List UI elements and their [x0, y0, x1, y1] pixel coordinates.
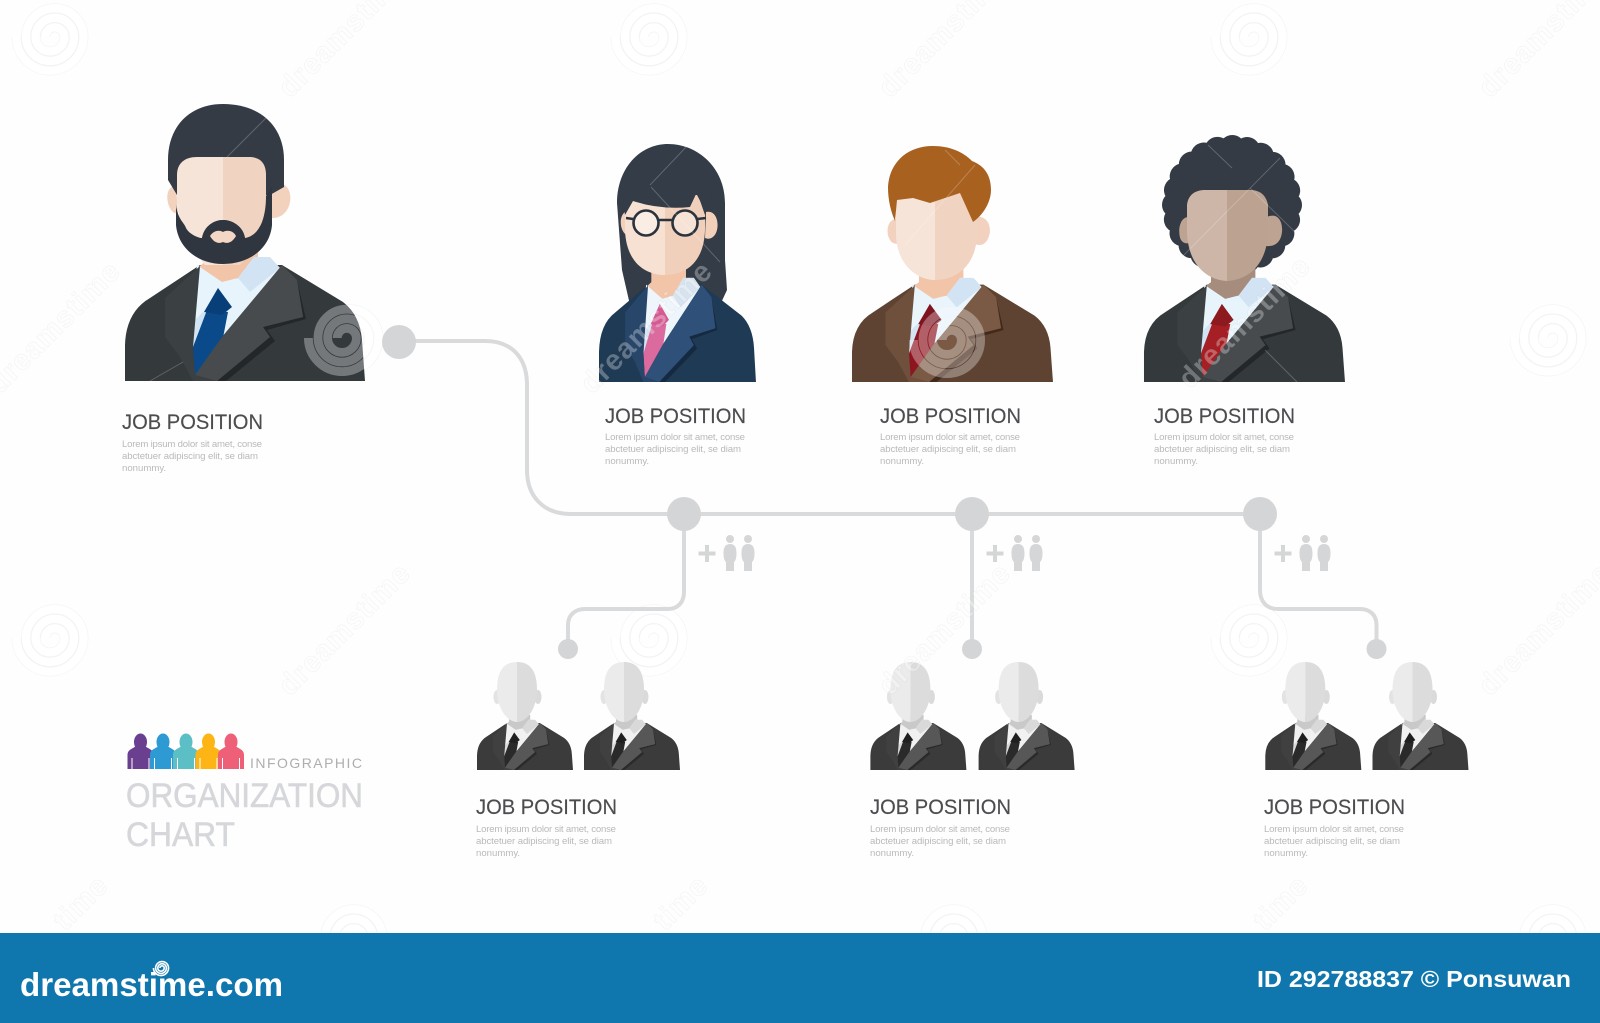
label: brown-haired man — [880, 405, 1021, 467]
ears — [888, 217, 990, 245]
label: team 2: JOB POSITION — [870, 796, 1011, 819]
icon: add two people, group 1 — [698, 535, 754, 571]
face — [625, 195, 665, 275]
label: afro-haired man: Lorem ipsum dolor sit amet, conse — [1154, 432, 1294, 443]
label: team 2: Lorem ipsum dolor sit amet, conse — [870, 824, 1010, 835]
label: manager: nonummy. — [122, 463, 166, 474]
label: afro-haired man — [1154, 405, 1295, 467]
label: afro-haired man: JOB POSITION — [1154, 405, 1295, 428]
ears — [621, 211, 718, 239]
label: team 3: Lorem ipsum dolor sit amet, conse — [1264, 824, 1404, 835]
label: team 2 — [870, 796, 1011, 859]
label: woman: nonummy. — [605, 456, 649, 467]
watermark overlay: time — [647, 869, 715, 937]
label: team 2: nonummy. — [870, 848, 914, 859]
ears — [1179, 216, 1282, 246]
label: woman: abctetuer adipiscing elit, se diam — [605, 444, 741, 455]
label: afro-haired man: abctetuer adipiscing elit, se diam — [1154, 444, 1290, 455]
label: afro-haired man: nonummy. — [1154, 456, 1198, 467]
label: team 1: nonummy. — [476, 848, 520, 859]
title: infographic: INFOGRAPHIC — [250, 755, 362, 771]
watermark overlay: dreamstime — [872, 557, 1017, 702]
watermark overlay: dreamstime — [272, 557, 417, 702]
label: brown-haired man: Lorem ipsum dolor sit amet, conse — [880, 432, 1020, 443]
label: team 1: abctetuer adipiscing elit, se diam — [476, 836, 612, 847]
label: team 2: abctetuer adipiscing elit, se diam — [870, 836, 1006, 847]
label: woman — [605, 405, 746, 467]
glasses — [626, 210, 706, 236]
watermark overlay: time — [47, 869, 115, 937]
title: organization chart: ORGANIZATION — [126, 777, 363, 815]
hair — [168, 104, 284, 195]
label: team 1: Lorem ipsum dolor sit amet, conse — [476, 824, 616, 835]
connector lines — [399, 341, 1376, 649]
person: man with brown hair — [852, 146, 1053, 382]
label: team 1 — [476, 796, 617, 859]
person: man with afro hair — [1144, 148, 1345, 382]
label: manager — [122, 411, 263, 474]
watermark overlay: dreamstime — [574, 255, 719, 400]
label: team 3: JOB POSITION — [1264, 796, 1405, 819]
label: team 3: nonummy. — [1264, 848, 1308, 859]
label: team 3: abctetuer adipiscing elit, se diam — [1264, 836, 1400, 847]
label: brown-haired man: abctetuer adipiscing elit, se diam — [880, 444, 1016, 455]
face — [177, 157, 223, 265]
fringe — [622, 165, 712, 215]
connector nodes — [382, 325, 1386, 659]
beard — [176, 186, 272, 264]
footer logo wordmark: dreamstime.com — [20, 966, 283, 1003]
watermark overlay: dreamstime — [1172, 250, 1317, 395]
label: brown-haired man: JOB POSITION — [880, 405, 1021, 428]
person: bearded manager — [125, 104, 365, 381]
label: team 3 — [1264, 796, 1405, 859]
icon: add two people, group 2 — [986, 535, 1042, 571]
label: manager: abctetuer adipiscing elit, se diam — [122, 451, 258, 462]
person: woman with glasses — [599, 144, 756, 382]
footer bar — [0, 933, 1600, 1023]
long hair — [617, 144, 727, 305]
face — [896, 190, 935, 280]
label: team 1: JOB POSITION — [476, 796, 617, 819]
label: woman: JOB POSITION — [605, 405, 746, 428]
icon: add two people, group 3 — [1274, 535, 1330, 571]
team member pair 1 — [477, 662, 680, 770]
label: manager: Lorem ipsum dolor sit amet, conse — [122, 439, 262, 450]
label: brown-haired man: nonummy. — [880, 456, 924, 467]
team member pair 3 — [1265, 662, 1468, 770]
title: organization chart — [126, 777, 363, 854]
team member pair 2 — [870, 662, 1075, 770]
label: woman: Lorem ipsum dolor sit amet, conse — [605, 432, 745, 443]
face — [1187, 190, 1227, 281]
image id and credit: ID 292788837 © Ponsuwan — [1257, 966, 1571, 992]
afro hair — [1175, 148, 1289, 262]
logo: five coloured people — [128, 734, 244, 769]
footer logo spiral — [153, 962, 169, 976]
ears — [167, 182, 290, 218]
label: manager: JOB POSITION — [122, 411, 263, 434]
title: organization chart: CHART — [126, 816, 235, 854]
watermark overlay: time — [1247, 869, 1315, 937]
hair — [888, 146, 991, 222]
